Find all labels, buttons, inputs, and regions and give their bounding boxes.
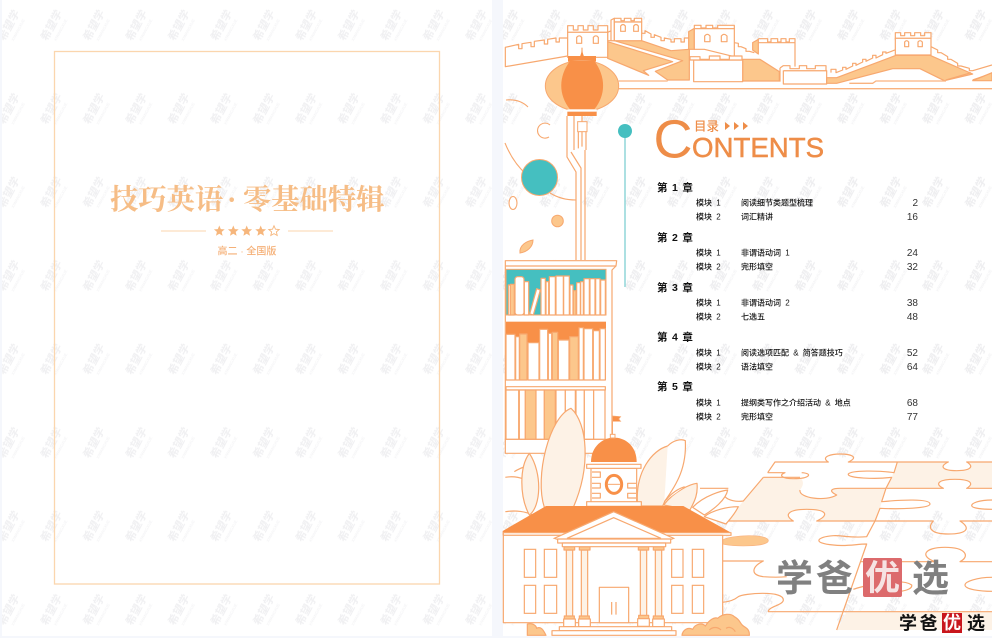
watermark pattern right page (503, 0, 992, 636)
icon: lantern (545, 48, 619, 150)
chapter 4: 第 4 章 (657, 330, 693, 344)
chapter 4: 52 (907, 348, 918, 359)
chapter 1: 2 (912, 198, 918, 209)
panel: cover frame (54, 52, 440, 584)
roof (503, 506, 731, 535)
chapter 4: 64 (907, 362, 918, 373)
chapter 3: 非谓语动词 2 (741, 298, 790, 308)
chapter 5: 68 (907, 398, 918, 409)
chapter 5: 提纲类写作之介绍活动 & 地点 (741, 398, 851, 408)
logo: small brand mark: 爸 (920, 614, 938, 634)
chapter 1: 16 (907, 212, 918, 223)
heading: contents (654, 110, 824, 170)
chapter 1: 第 1 章 (657, 181, 693, 194)
steps (552, 627, 676, 635)
illustration: bookshelf (505, 261, 617, 453)
chapter 5 (657, 380, 918, 423)
books shelf 1 (508, 276, 605, 315)
logo: small brand mark: 学 (899, 612, 917, 634)
wall block (690, 56, 743, 82)
orange oval (723, 536, 768, 546)
heading: cover title: · (227, 185, 236, 216)
chapter 2: 32 (907, 262, 918, 273)
decor: arcs and circles (505, 100, 576, 210)
heading: cover title: 技巧英语 (110, 184, 223, 216)
chapter 1: 模块 1 (696, 198, 721, 208)
pediment (554, 512, 674, 547)
cupola (587, 434, 641, 506)
logo: large watermark: 学 (776, 558, 813, 599)
chapter 2 (657, 231, 918, 273)
chapter 3: 48 (907, 312, 918, 323)
books shelf 2 (506, 328, 605, 380)
chapter 3: 第 3 章 (657, 281, 693, 294)
chapter 1 (657, 181, 918, 223)
star rating with rules (161, 226, 333, 236)
chapter 5: 77 (907, 412, 918, 423)
chapter 5: 模块 2 (696, 412, 721, 422)
wall ground lines (619, 81, 992, 89)
icon: teal circle (522, 160, 558, 196)
flag (613, 416, 621, 435)
logo: large watermark: 选 (912, 558, 949, 599)
logo: large watermark (776, 558, 949, 599)
logo: small brand mark: 选 (967, 614, 985, 634)
chapter 2: 第 2 章 (657, 231, 693, 244)
chapter 2: 24 (907, 248, 918, 259)
books shelf 3 (506, 390, 605, 439)
chapter 1: 模块 2 (696, 212, 721, 222)
chapter 5: 模块 1 (696, 398, 721, 408)
tower 1 (568, 26, 608, 57)
tower 2 (611, 18, 642, 41)
leaves (505, 408, 738, 524)
illustration: lantern pipes (567, 116, 585, 260)
table of contents (657, 181, 918, 423)
chapter 2: 模块 1 (696, 248, 721, 258)
watermark pattern left page (2, 0, 492, 636)
chapter 4: 语法填空 (741, 362, 773, 372)
columns (564, 547, 664, 627)
long wall and tower 5 (827, 55, 973, 83)
chapter 3: 七选五 (741, 312, 765, 322)
windows (524, 549, 704, 613)
chapter 2: 完形填空 (741, 262, 773, 272)
icon: leaf (520, 240, 533, 253)
panel: right page (503, 0, 992, 636)
heading: cover title: 零基础特辑 (243, 184, 384, 216)
chapter 4 (657, 330, 918, 373)
teal pin line (618, 124, 632, 287)
tower 3 (689, 25, 734, 57)
cover subtitle: 高二 · 全国版 (218, 244, 276, 258)
tower 4 (753, 39, 795, 67)
illustration: great wall (505, 18, 992, 150)
wall block 2 (780, 66, 827, 84)
icon: small orange circle (552, 215, 563, 227)
chapter 4: 阅读选项匹配 & 简答题技巧 (741, 348, 843, 358)
panel: left page (2, 0, 492, 636)
logo: large watermark: 优 (865, 559, 900, 598)
logo: large watermark: 爸 (816, 558, 853, 599)
chapter 3: 模块 1 (696, 298, 721, 308)
chapter 2: 模块 2 (696, 262, 721, 272)
heading: cover title (110, 184, 384, 216)
illustration: building (503, 408, 749, 635)
chapter 4: 模块 2 (696, 362, 721, 372)
bushes (527, 624, 546, 635)
chapter 1: 阅读细节类题型梳理 (741, 198, 813, 208)
logo: small brand mark (899, 612, 985, 634)
logo: small brand mark: 优 (943, 613, 961, 633)
heading: contents: 目录 (694, 120, 719, 134)
chapter 3: 38 (907, 298, 918, 309)
heading: contents: C (654, 110, 692, 170)
chapter 3: 模块 2 (696, 312, 721, 322)
chapter 5: 第 5 章 (657, 380, 693, 393)
chapter 4: 模块 1 (696, 348, 721, 358)
chapter 3 (657, 281, 918, 323)
heading: contents: ONTENTS (692, 132, 824, 163)
illustration: puzzle ground (700, 454, 992, 630)
chapter 1: 词汇精讲 (741, 212, 773, 222)
chapter 2: 非谓语动词 1 (741, 248, 790, 258)
chapter 5: 完形填空 (741, 412, 773, 422)
door (599, 587, 629, 623)
